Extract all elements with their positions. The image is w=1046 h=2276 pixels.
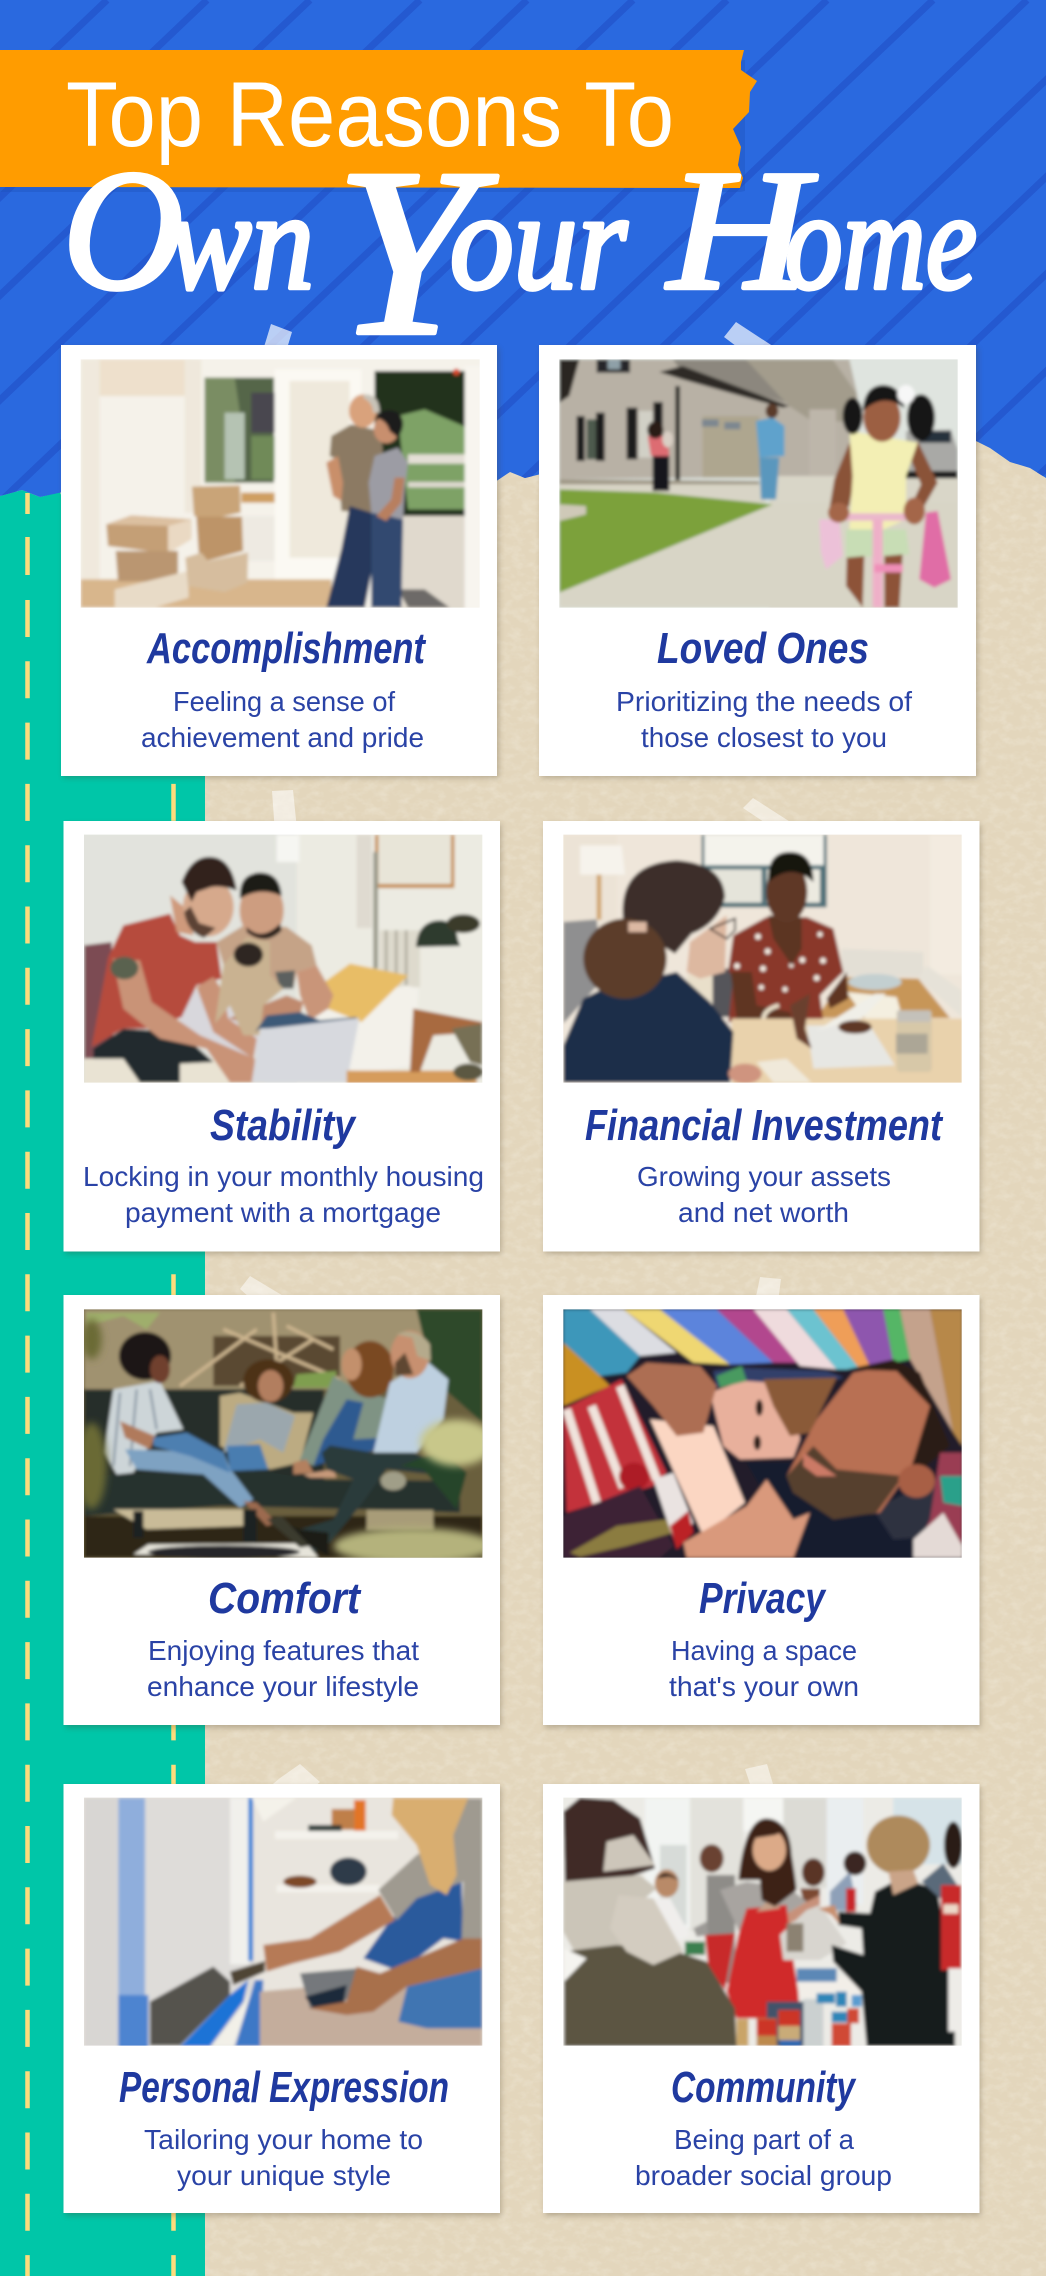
description: achievement and pride xyxy=(141,722,424,753)
heading: Comfort xyxy=(208,1574,362,1623)
description: that's your own xyxy=(669,1671,859,1702)
blue header background with diagonal stripes xyxy=(0,0,1046,500)
description: enhance your lifestyle xyxy=(147,1671,419,1702)
heading: Financial Investment xyxy=(585,1101,944,1150)
description xyxy=(635,2124,892,2191)
photo: food drive volunteers xyxy=(560,1795,965,2050)
description xyxy=(147,1635,419,1702)
description: Having a space xyxy=(671,1635,857,1666)
heading: Accomplishment xyxy=(146,624,427,673)
description: broader social group xyxy=(635,2160,892,2191)
photo: family on outdoor sofa xyxy=(77,1306,493,1564)
description: payment with a mortgage xyxy=(125,1197,441,1228)
panel: Privacy xyxy=(543,1295,981,1728)
photo: girl on scooter in front of house xyxy=(556,356,961,611)
photo: couple with pug and laptop xyxy=(80,832,485,1087)
orange torn banner xyxy=(0,50,757,192)
title: Top Reasons To: Top Reasons To xyxy=(66,64,674,166)
heading: Stability xyxy=(210,1101,357,1150)
title: Own Your Home: ome xyxy=(785,164,977,319)
photo: couple with moving boxes xyxy=(78,356,483,611)
panel: Comfort xyxy=(64,1295,502,1728)
description xyxy=(144,2124,423,2191)
panel: Accomplishment xyxy=(61,345,499,778)
description: Tailoring your home to xyxy=(144,2124,423,2155)
panel: Personal Expression xyxy=(64,1784,502,2216)
description: Growing your assets xyxy=(637,1161,891,1192)
title: Own Your Home xyxy=(63,119,977,385)
panel: Community xyxy=(543,1784,981,2216)
panel: Financial Investment xyxy=(543,821,981,1254)
heading: Privacy xyxy=(699,1574,827,1623)
description: your unique style xyxy=(177,2160,391,2191)
description xyxy=(669,1635,859,1702)
description: and net worth xyxy=(678,1197,849,1228)
green side band with stitched lines xyxy=(0,490,205,2276)
title: Own Your Home: our xyxy=(450,164,627,319)
description: those closest to you xyxy=(641,722,887,753)
description xyxy=(141,686,424,753)
description xyxy=(83,1161,484,1228)
photo: meeting at a table xyxy=(560,832,965,1087)
description: Prioritizing the needs of xyxy=(616,686,912,717)
title: Own Your Home: Y xyxy=(335,119,498,385)
heading: Personal Expression xyxy=(119,2063,449,2112)
description: Being part of a xyxy=(674,2124,854,2155)
tapes above the cards xyxy=(240,322,795,1821)
panel: Stability xyxy=(64,821,502,1254)
title: Own Your Home: wn xyxy=(168,164,314,319)
title: Own Your Home: O xyxy=(63,136,183,326)
panel: Loved Ones xyxy=(539,345,978,778)
description xyxy=(637,1161,891,1228)
heading: Community xyxy=(671,2063,857,2112)
photo: father and child under a blanket xyxy=(560,1306,965,1561)
description: Locking in your monthly housing xyxy=(83,1161,484,1192)
description xyxy=(616,686,912,753)
description: Enjoying features that xyxy=(148,1635,419,1666)
title: Own Your Home: H xyxy=(666,136,817,326)
heading: Loved Ones xyxy=(657,624,869,673)
description: Feeling a sense of xyxy=(173,686,395,717)
photo: painting a wall xyxy=(80,1795,485,2050)
